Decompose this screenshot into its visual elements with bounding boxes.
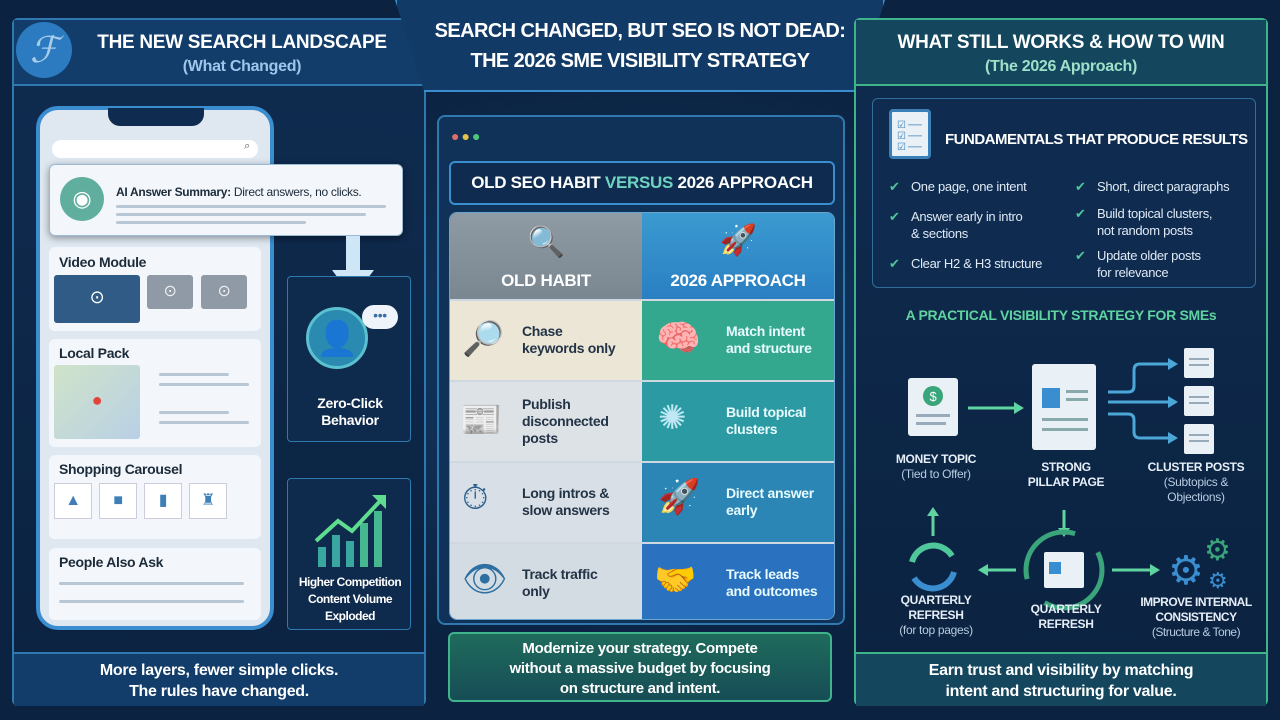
row: intros: Direct answer — [726, 485, 814, 501]
chart: rising bars — [314, 495, 386, 567]
footer text: center: without a massive budget by focusing — [510, 660, 770, 677]
row: intros: Long intros & — [522, 485, 609, 501]
row: keywords: keywords only — [522, 340, 615, 356]
label: improve consistency: CONSISTENCY — [1155, 610, 1237, 624]
video module: Video Module — [59, 254, 146, 270]
checklist: Clear H2 & H3 structure — [911, 256, 1042, 271]
diagram: strategy flow: $ — [930, 389, 938, 404]
arrow: down to zero click — [332, 236, 374, 276]
footer text: right — [856, 652, 1266, 706]
row: keywords: 🔎 — [462, 320, 504, 358]
panel: zero-click behavior: Behavior — [321, 412, 379, 428]
heading: right panel: WHAT STILL WORKS & HOW TO WIN — [898, 32, 1224, 53]
footer text: center: Modernize your strategy. Compete — [522, 640, 758, 657]
icon: clipboard — [889, 109, 931, 159]
row: posts: ✺ — [658, 399, 686, 437]
people also ask — [49, 548, 261, 620]
panel: higher competition: Higher Competition — [299, 575, 401, 589]
label: cluster posts: (Subtopics & — [1164, 475, 1228, 489]
footer text: center — [448, 632, 832, 702]
diagram: strategy flow: ⚙ — [1208, 569, 1227, 594]
heading: practical visibility strategy: A PRACTICAL VISIBILITY STRATEGY FOR SMEs — [906, 307, 1216, 323]
footer text: center: on structure and intent. — [560, 680, 720, 697]
label: pillar page — [1028, 460, 1104, 489]
heading: left panel: THE NEW SEARCH LANDSCAPE — [97, 32, 387, 53]
checklist: Update older posts — [1097, 248, 1201, 263]
row: posts: Build topical — [726, 404, 806, 420]
row: keywords: Chase — [522, 323, 563, 339]
row: intros — [450, 461, 834, 542]
footer text: right: intent and structuring for value. — [945, 683, 1176, 700]
checklist: Answer early in intro — [911, 209, 1022, 224]
row: tracking — [450, 542, 834, 621]
row: posts: posts — [522, 430, 558, 446]
label: pillar page: STRONG — [1041, 460, 1091, 474]
video module: ⊙ — [217, 283, 231, 300]
row: posts: clusters — [726, 421, 777, 437]
label: quarterly refresh center: QUARTERLY — [1031, 602, 1101, 616]
panel: higher competition: Exploded — [325, 609, 375, 623]
label: improve consistency: IMPROVE INTERNAL — [1140, 595, 1252, 609]
title: SEARCH CHANGED, BUT SEO IS NOT DEAD: — [435, 20, 845, 42]
diagram: strategy flow: ⚙ — [1204, 533, 1231, 568]
panel: zero-click behavior: ••• — [373, 307, 387, 323]
callout: AI answer summary: ◉ — [73, 186, 91, 211]
table header — [450, 213, 834, 299]
row: tracking: 🤝 — [654, 561, 696, 599]
label: money topic: (Tied to Offer) — [901, 467, 971, 481]
label: quarterly refresh left: QUARTERLY — [901, 593, 971, 607]
row: posts: disconnected — [522, 413, 609, 429]
table header: OLD HABIT — [501, 271, 591, 290]
browser dots: ●●● — [451, 128, 482, 144]
label: quarterly refresh left: (for top pages) — [899, 623, 973, 637]
row: tracking: Track leads — [726, 566, 799, 582]
label: quarterly refresh center — [1031, 602, 1102, 631]
footer text: left: More layers, fewer simple clicks. — [100, 662, 338, 679]
panel: what still works — [854, 18, 1268, 706]
heading: fundamentals: FUNDAMENTALS THAT PRODUCE RESULTS — [945, 131, 1248, 148]
panel: zero-click behavior — [287, 276, 411, 442]
heading: right panel: (The 2026 Approach) — [985, 58, 1137, 75]
local pack: ● — [92, 390, 102, 410]
row: posts: Publish — [522, 396, 570, 412]
shopping carousel: ■ — [113, 492, 123, 509]
row: intros: slow answers — [522, 502, 609, 518]
checklist: & sections — [911, 226, 968, 241]
shopping carousel: ▮ — [159, 492, 167, 509]
checklist: Build topical clusters, — [1097, 206, 1212, 221]
callout: AI answer summary — [49, 164, 403, 236]
table header: 🔍 — [527, 226, 565, 259]
label: quarterly refresh left — [899, 593, 973, 637]
shopping carousel — [49, 455, 261, 539]
panel: higher competition: Content Volume — [308, 592, 392, 606]
row: keywords: and structure — [726, 340, 812, 356]
label: pillar page: PILLAR PAGE — [1028, 475, 1104, 489]
panel: zero-click behavior: Zero-Click — [317, 395, 383, 411]
video module — [49, 247, 261, 331]
icon: user with thought bubble — [306, 307, 368, 369]
label: cluster posts — [1148, 460, 1244, 504]
checklist: for relevance — [1097, 265, 1168, 280]
label: money topic: MONEY TOPIC — [896, 452, 976, 466]
local pack: Local Pack — [59, 345, 129, 361]
local pack — [49, 339, 261, 447]
table header: 2026 APPROACH — [670, 271, 806, 290]
panel: fundamentals — [872, 98, 1256, 288]
panel: new search landscape — [12, 18, 426, 706]
comparison table — [449, 212, 835, 620]
diagram: strategy flow — [908, 348, 1231, 610]
row: intros: 🚀 — [658, 478, 700, 516]
footer text: left — [14, 652, 424, 706]
label: cluster posts: Objections) — [1167, 490, 1225, 504]
row: keywords: Match intent — [726, 323, 805, 339]
label: quarterly refresh left: REFRESH — [908, 608, 964, 622]
search bar: ⌕ — [244, 140, 250, 152]
row: tracking: only — [522, 583, 550, 599]
search bar — [52, 140, 258, 158]
shopping carousel: ♜ — [201, 492, 215, 509]
shopping carousel: ▲ — [65, 492, 81, 509]
icon: logo: ℱ — [30, 30, 58, 70]
row: tracking: and outcomes — [726, 583, 817, 599]
heading: old seo habit versus 2026 approach — [449, 161, 835, 205]
heading: left panel — [14, 20, 424, 86]
shopping carousel: Shopping Carousel — [59, 461, 182, 477]
row: tracking: 👁 — [462, 558, 507, 599]
people also ask: People Also Ask — [59, 554, 163, 570]
icon: clipboard: ☑ ── — [897, 131, 922, 142]
row: posts — [450, 380, 834, 461]
video module: ⊙ — [90, 287, 104, 307]
row: intros: early — [726, 502, 757, 518]
label: quarterly refresh center: REFRESH — [1038, 617, 1094, 631]
icon: clipboard: ☑ ── — [897, 142, 922, 153]
diagram: strategy flow: ⚙ — [1168, 548, 1204, 594]
heading: old seo habit versus 2026 approach: OLD SEO HABIT VERSUS 2026 APPROACH — [471, 173, 813, 192]
row: keywords: 🧠 — [656, 317, 701, 358]
checklist: not random posts — [1097, 223, 1193, 238]
row: intros: ⏱ — [462, 479, 488, 517]
checklist — [890, 179, 1230, 280]
row: posts: 📰 — [460, 401, 502, 439]
title — [395, 0, 885, 92]
checklist: One page, one intent — [911, 179, 1026, 194]
label: money topic — [896, 452, 976, 481]
heading: right panel — [856, 20, 1266, 86]
callout: AI answer summary: AI Answer Summary: Direct answers, no clicks. — [116, 185, 361, 199]
label: improve consistency — [1140, 595, 1252, 639]
title: THE 2026 SME VISIBILITY STRATEGY — [470, 50, 810, 72]
heading: left panel: (What Changed) — [183, 58, 301, 75]
panel: browser comparison — [437, 115, 845, 625]
footer text: right: Earn trust and visibility by matching — [929, 662, 1193, 679]
icon: clipboard: ☑ ── — [897, 120, 922, 131]
panel: higher competition — [287, 478, 411, 630]
table header: 🚀 — [719, 224, 757, 257]
video module: ⊙ — [163, 283, 177, 300]
row: keywords — [450, 299, 834, 380]
checklist: Short, direct paragraphs — [1097, 179, 1229, 194]
row: tracking: Track traffic — [522, 566, 597, 582]
label: cluster posts: CLUSTER POSTS — [1148, 460, 1244, 474]
icon: logo — [16, 22, 72, 78]
label: improve consistency: (Structure & Tone) — [1152, 625, 1240, 639]
icon: user with thought bubble: 👤 — [316, 320, 358, 358]
phone mockup — [36, 106, 274, 630]
footer text: left: The rules have changed. — [129, 683, 309, 700]
